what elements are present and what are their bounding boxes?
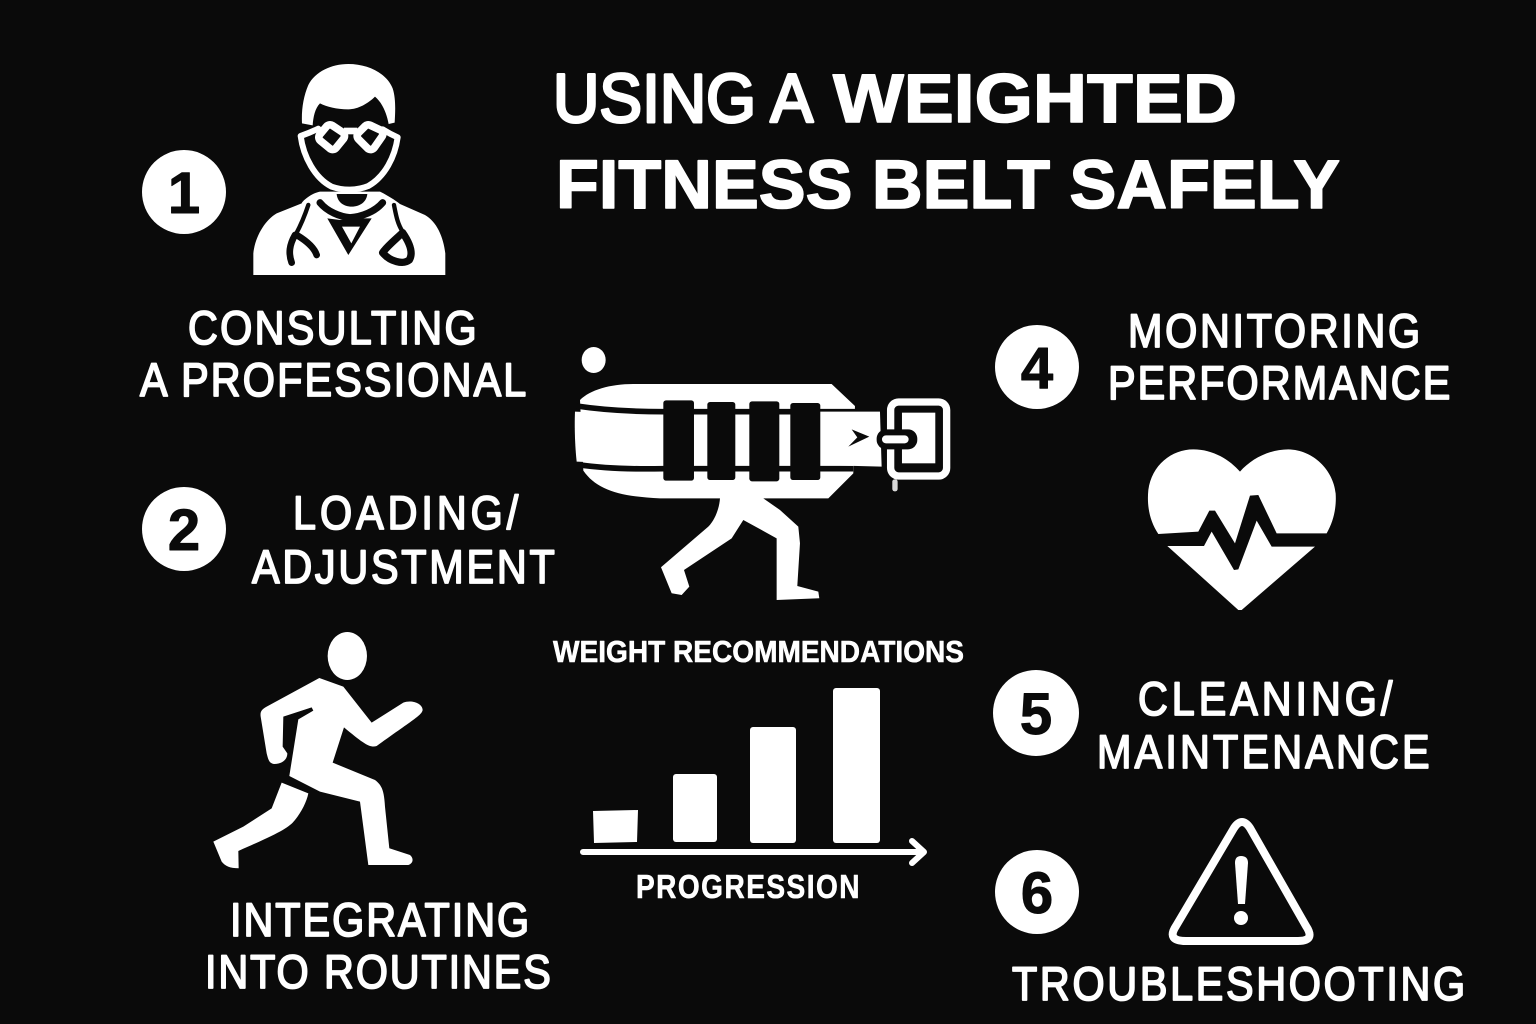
step 1 number badge: [142, 150, 226, 234]
label: consulting a professional: [140, 303, 526, 407]
label: monitoring performance: [1108, 306, 1450, 410]
icon: weighted belt figure: [575, 347, 947, 600]
icon: warning triangle: [1173, 822, 1310, 941]
arrow: progression axis: [583, 841, 924, 863]
bar chart: progression: [583, 688, 924, 863]
label: cleaning/maintenance: CLEANING/: [1138, 674, 1393, 726]
step 6 number badge: [995, 850, 1079, 934]
label: monitoring performance: PERFORMANCE: [1108, 358, 1450, 410]
icon: running person: [213, 632, 423, 868]
label: monitoring performance: MONITORING: [1128, 306, 1420, 358]
title: [553, 60, 1340, 223]
label: integrating into routines: [205, 895, 551, 999]
step 2 number badge: [142, 487, 226, 571]
label: cleaning/maintenance: [1097, 674, 1430, 779]
label: consulting a professional: CONSULTING: [188, 303, 477, 355]
step 4 number badge: 4: [1021, 336, 1053, 401]
step 5 number badge: 5: [1020, 682, 1052, 747]
step 1 number badge: 1: [168, 161, 200, 226]
step 4 number badge: [995, 325, 1079, 409]
label: troubleshooting: TROUBLESHOOTING: [1012, 959, 1465, 1011]
label: cleaning/maintenance: MAINTENANCE: [1097, 727, 1430, 779]
label: integrating into routines: INTEGRATING: [230, 895, 529, 947]
heading: weight recommendations: WEIGHT RECOMMENDATIONS: [553, 634, 964, 669]
step 5 number badge: [993, 670, 1079, 756]
icon: doctor: [253, 64, 445, 275]
icon: heart with pulse: [1148, 449, 1336, 610]
step 2 number badge: 2: [168, 498, 200, 563]
label: consulting a professional: A PROFESSIONAL: [140, 355, 526, 407]
label: loading/adjustment: LOADING/: [293, 488, 519, 540]
label: integrating into routines: INTO ROUTINES: [205, 947, 551, 999]
label: loading/adjustment: [252, 488, 555, 594]
label: progression: PROGRESSION: [636, 869, 860, 906]
title: USING A: [553, 60, 813, 137]
title: WEIGHTED: [833, 60, 1237, 137]
title: FITNESS BELT SAFELY: [556, 146, 1340, 223]
label: loading/adjustment: ADJUSTMENT: [252, 542, 555, 594]
step 6 number badge: 6: [1021, 861, 1053, 926]
